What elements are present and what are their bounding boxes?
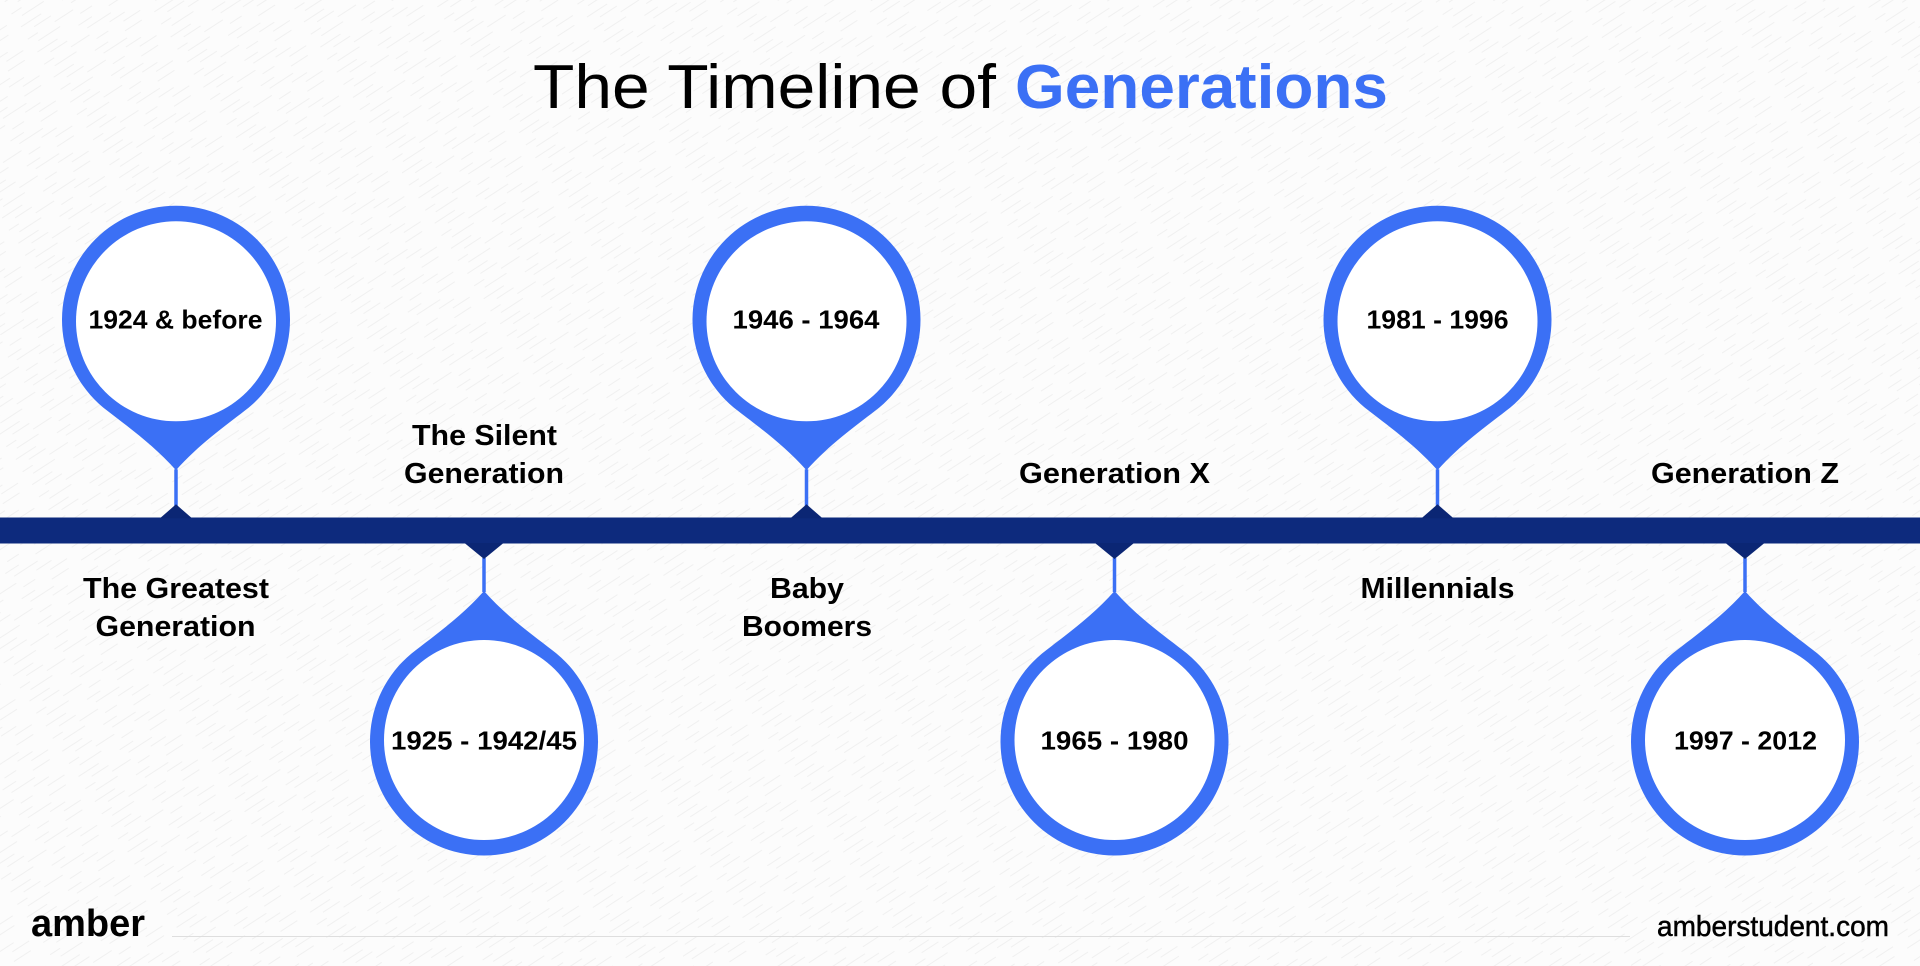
marker: 1946 to 1964: 1946 - 1964 bbox=[732, 304, 880, 334]
label: Baby Boomers bbox=[742, 573, 872, 643]
label: Generation Z: Generation Z bbox=[1651, 458, 1839, 490]
title bbox=[533, 53, 1388, 122]
marker: 1925 to 1942/45 bbox=[370, 543, 598, 855]
label: Millennials: Millennials bbox=[1360, 573, 1514, 605]
marker: 1924 and before: 1924 & before bbox=[88, 304, 262, 334]
title: Generations bbox=[1015, 53, 1388, 122]
marker: 1924 and before bbox=[62, 206, 290, 518]
marker: 1997 to 2012 bbox=[1631, 543, 1859, 855]
label: The Silent Generation bbox=[404, 420, 564, 490]
logo: amber: amber bbox=[31, 903, 145, 945]
marker: 1981 to 1996 bbox=[1324, 206, 1552, 518]
marker: 1997 to 2012: 1997 - 2012 bbox=[1674, 726, 1817, 756]
website: amberstudent.com: amberstudent.com bbox=[1657, 911, 1889, 943]
label: The Greatest Generation: Generation bbox=[96, 611, 256, 643]
marker: 1965 to 1980 bbox=[1000, 543, 1228, 855]
label: The Greatest Generation: The Greatest bbox=[83, 573, 269, 605]
title: The Timeline of bbox=[533, 53, 997, 122]
marker: 1965 to 1980: 1965 - 1980 bbox=[1040, 726, 1188, 756]
marker: 1981 to 1996: 1981 - 1996 bbox=[1366, 304, 1509, 334]
label: The Greatest Generation bbox=[83, 573, 269, 643]
label: Generation X: Generation X bbox=[1019, 458, 1211, 490]
timeline bar bbox=[0, 518, 1920, 544]
label: The Silent Generation: The Silent bbox=[412, 420, 557, 452]
label: Baby Boomers: Baby bbox=[770, 573, 844, 605]
label: The Silent Generation: Generation bbox=[404, 458, 564, 490]
marker: 1946 to 1964 bbox=[692, 206, 920, 518]
marker: 1925 to 1942/45: 1925 - 1942/45 bbox=[391, 726, 577, 756]
label: Baby Boomers: Boomers bbox=[742, 611, 872, 643]
